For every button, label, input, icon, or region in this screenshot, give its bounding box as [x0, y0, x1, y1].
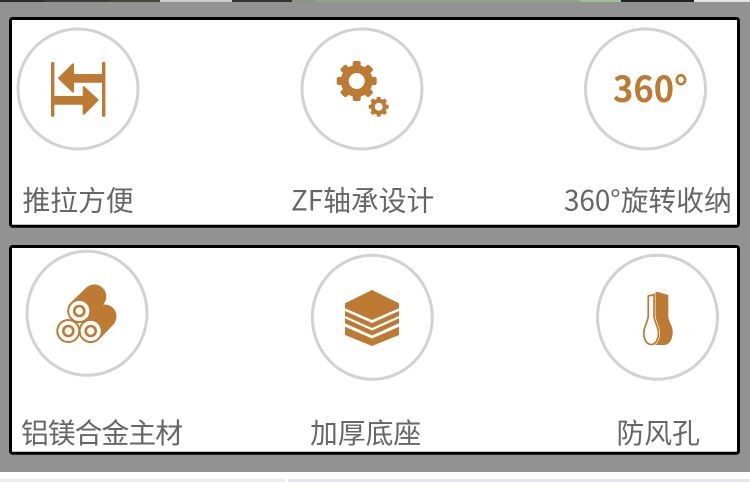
icon circle: [598, 255, 718, 379]
panel: top row features: [10, 18, 738, 226]
panel background: [10, 246, 738, 453]
icon circle: [302, 29, 422, 149]
icon circle: [312, 255, 432, 379]
feature: 360 rotation: [564, 29, 732, 220]
panel: bottom row features: [10, 246, 738, 453]
icon circle: [18, 29, 138, 149]
icon: gears: [337, 61, 389, 117]
bottom photo strip: [0, 472, 750, 482]
icon circle: [586, 29, 706, 149]
icon: opposing arrows: [51, 62, 105, 117]
label: 铝镁合金主材: [21, 412, 183, 452]
icon: bag with hole: [644, 292, 673, 345]
feature: bearing design: [291, 29, 434, 220]
panel background: [10, 18, 738, 226]
icon circle: [27, 251, 147, 375]
label: 360°旋转收纳: [564, 180, 732, 220]
icon: stacked layers: [345, 290, 399, 346]
feature: push-pull: [18, 29, 138, 220]
label: 加厚底座: [310, 412, 421, 452]
label: 推拉方便: [22, 180, 134, 220]
icon: metal rolls: [57, 296, 104, 342]
feature: alloy material: [21, 251, 183, 452]
feature: wind hole: [598, 255, 718, 452]
label: ZF轴承设计: [291, 180, 434, 220]
icon: 360 degrees: 360°: [613, 61, 688, 113]
top photo strip: [0, 0, 750, 2]
feature: thick base: [310, 255, 432, 452]
label: 防风孔: [616, 412, 700, 452]
